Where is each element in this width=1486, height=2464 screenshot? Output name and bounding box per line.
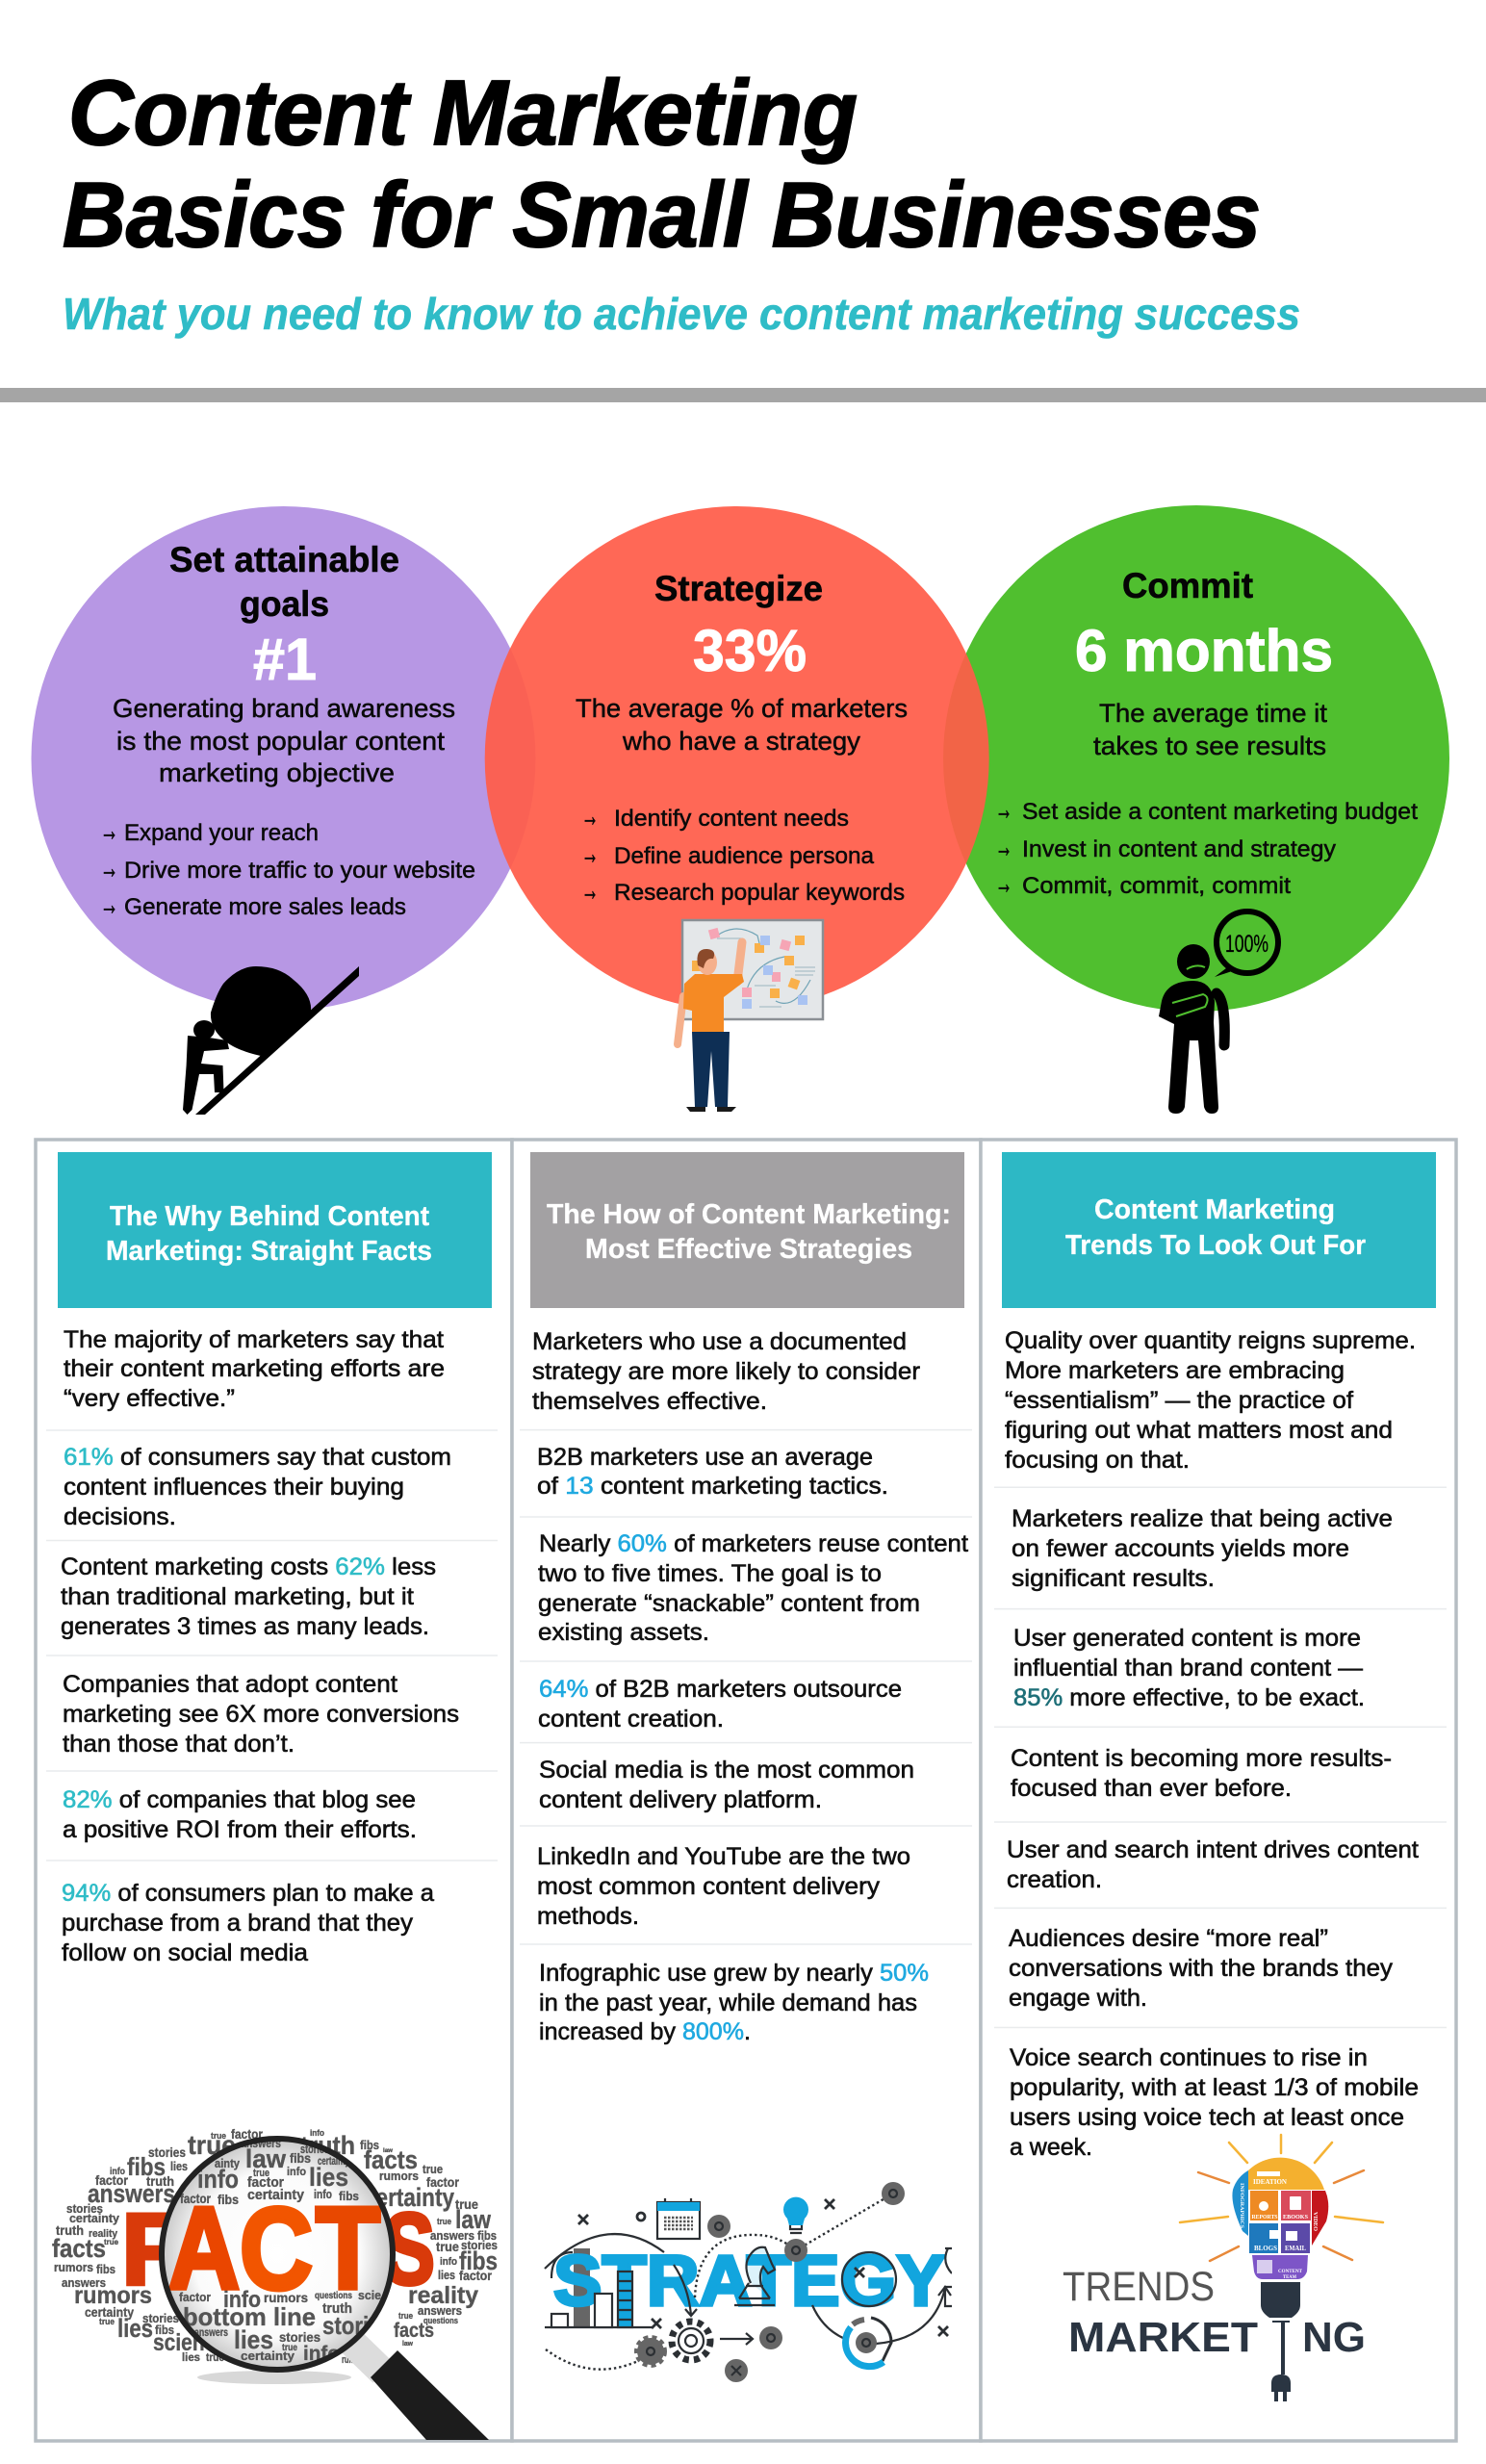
fact: very effective: The majority of marketers say that: [64, 1326, 444, 1353]
bullet list: [581, 799, 905, 907]
icon: facts word cloud under magnifying glass: truth: [322, 2300, 352, 2317]
bullet list: →: [995, 866, 1012, 900]
trend: quality over quantity: figuring out what matters most and: [1005, 1417, 1393, 1444]
header: trends to look out for: [1002, 1152, 1436, 1308]
icon: facts word cloud under magnifying glass: rumors: [342, 2354, 367, 2366]
icon: facts word cloud under magnifying glass: lies: [309, 2163, 348, 2192]
description: [576, 694, 908, 756]
bullet list: →: [995, 792, 1012, 826]
icon: facts word cloud under magnifying glass: questions: [315, 2291, 352, 2301]
icon: facts word cloud under magnifying glass: T: [316, 2182, 380, 2313]
panel: circle backgrounds: [31, 505, 1449, 1012]
trend: fewer accounts: Marketers realize that being active: [1012, 1505, 1393, 1532]
icon: facts word cloud under magnifying glass: F: [121, 2193, 185, 2306]
icon: facts word cloud under magnifying glass: factor: [231, 2126, 263, 2142]
panel: the why behind content marketing: [36, 1140, 512, 2441]
icon: facts word cloud under magnifying glass: true: [423, 2162, 443, 2176]
icon: trends marketing light bulb: VIDEO: [1312, 2212, 1318, 2231]
heading: Set attainable: [169, 540, 399, 579]
icon: facts word cloud under magnifying glass: reality: [89, 2228, 118, 2240]
fact: infographic use: in the past year, while demand has: [539, 1989, 917, 2016]
icon: facts word cloud under magnifying glass: true: [211, 2131, 226, 2141]
trend: user generated content: [1013, 1625, 1365, 1711]
trend: search intent: creation.: [1007, 1866, 1102, 1893]
icon: facts word cloud under magnifying glass: lies: [170, 2159, 188, 2173]
icon: facts word cloud under magnifying glass: scie: [358, 2288, 381, 2302]
fact: 60% reuse: [538, 1530, 968, 1646]
icon: facts word cloud under magnifying glass: fibs: [96, 2262, 115, 2276]
fact: linkedin and youtube: [537, 1843, 910, 1930]
icon: trends marketing light bulb: IDEATION: [1253, 2178, 1287, 2186]
bullet list: Drive more traffic to your website: [124, 858, 475, 884]
icon: facts word cloud under magnifying glass: info: [310, 2128, 324, 2138]
icon: facts word cloud under magnifying glass: truth: [146, 2173, 174, 2189]
fact: 62%: generates 3 times as many leads.: [61, 1613, 429, 1640]
trend: voice search: a week.: [1010, 2134, 1092, 2161]
fact: 82%: 82% of companies that blog see: [63, 1786, 416, 1813]
fact: 13 tactics: B2B marketers use an average: [537, 1444, 873, 1471]
trend: quality over quantity: More marketers are embracing: [1005, 1357, 1345, 1384]
icon: facts word cloud under magnifying glass: true: [206, 2350, 224, 2364]
description: Generating brand awareness: [113, 694, 455, 723]
bullet list: Research popular keywords: [614, 880, 905, 906]
icon: facts word cloud under magnifying glass: answers: [194, 2325, 228, 2339]
icon: facts word cloud under magnifying glass: answers: [62, 2275, 106, 2290]
icon: facts word cloud under magnifying glass: factor: [180, 2191, 211, 2206]
heading: Strategize: [654, 569, 823, 608]
trend: more real conversations: Audiences desire “more real”: [1009, 1925, 1328, 1952]
bullet list: Identify content needs: [614, 806, 849, 832]
fact: infographic use: [539, 1960, 929, 2045]
title: Basics for Small Businesses: [63, 164, 1261, 267]
icon: facts word cloud under magnifying glass: stories: [322, 2311, 393, 2340]
icon: trends marketing light bulb: TEAM: [1283, 2275, 1296, 2280]
icon: facts word cloud under magnifying glass: factor: [459, 2268, 492, 2283]
icon: facts word cloud under magnifying glass: ainty: [215, 2156, 241, 2170]
fact: documented strategy: themselves effective.: [532, 1388, 767, 1415]
bullet list: Commit, commit, commit: [1022, 873, 1291, 899]
icon: trends marketing light bulb: INFOGRAPHICS: [1239, 2183, 1244, 2228]
description: takes to see results: [1093, 732, 1326, 760]
icon: facts word cloud under magnifying glass: fibs: [477, 2228, 497, 2243]
fact: documented strategy: strategy are more likely to consider: [532, 1358, 920, 1385]
fact: documented strategy: [532, 1328, 920, 1415]
icon: facts word cloud under magnifying glass: true: [99, 2317, 115, 2326]
icon: trends marketing light bulb: EMAIL: [1285, 2245, 1306, 2252]
icon: committed person with 100% speech bubble: [1159, 911, 1278, 1114]
icon: facts word cloud under magnifying glass: certainty: [364, 2183, 454, 2212]
trend: results-focused: focused than ever before.: [1011, 1775, 1292, 1802]
header: most effective strategies: The How of Content Marketing:: [547, 1199, 951, 1230]
icon: facts word cloud under magnifying glass: info: [110, 2167, 125, 2177]
header: straight facts: The Why Behind Content: [110, 1201, 429, 1232]
description: [113, 694, 455, 787]
header: straight facts: Marketing: Straight Facts: [106, 1236, 432, 1267]
icon: facts word cloud under magnifying glass: bottom line: [183, 2302, 316, 2331]
bullet list: →: [995, 830, 1012, 863]
fact: social media: content delivery platform.: [539, 1786, 822, 1813]
trend: user generated content: User generated content is more: [1013, 1625, 1361, 1652]
icon: figure pushing a boulder uphill: [183, 966, 359, 1115]
fact: 64% outsource: 64% of B2B marketers outsource: [539, 1676, 902, 1703]
description: [1093, 699, 1328, 760]
icon: facts word cloud under magnifying glass: questions: [423, 2316, 458, 2325]
icon: facts word cloud under magnifying glass: law: [402, 2341, 414, 2348]
icon: trends marketing light bulb: EBOOKS: [1283, 2215, 1309, 2220]
title: [63, 62, 1261, 267]
fact: 82%: a positive ROI from their efforts.: [63, 1816, 417, 1843]
fact: 61%: [64, 1444, 451, 1530]
trend: fewer accounts: significant results.: [1012, 1565, 1215, 1592]
icon: trends marketing light bulb: CONTENT: [1278, 2270, 1303, 2274]
icon: facts word cloud under magnifying glass: factor: [179, 2290, 211, 2304]
fact: very effective: [64, 1326, 445, 1412]
icon: facts word cloud under magnifying glass: stories: [461, 2238, 498, 2252]
big number: #1: [253, 627, 317, 692]
fact: infographic use: increased by 800%.: [539, 2018, 751, 2045]
icon: facts word cloud under magnifying glass: stories: [148, 2144, 186, 2160]
trend: more real conversations: conversations with the brands they: [1009, 1955, 1394, 1982]
icon: facts word cloud under magnifying glass: reality: [408, 2282, 478, 2309]
trend: voice search: [1010, 2044, 1419, 2161]
icon: facts word cloud under magnifying glass: factor: [95, 2172, 128, 2188]
trend: voice search: users using voice tech at least once: [1010, 2104, 1404, 2131]
icon: facts word cloud under magnifying glass: true: [253, 2168, 269, 2179]
icon: committed person with 100% speech bubble: 100%: [1225, 931, 1268, 958]
fact: 64% outsource: [538, 1676, 902, 1732]
icon: facts word cloud under magnifying glass: lies: [234, 2325, 273, 2354]
icon: facts word cloud under magnifying glass: fibs: [339, 2189, 359, 2203]
bullet list: Set aside a content marketing budget: [1022, 799, 1418, 825]
trend: more real conversations: [1009, 1925, 1394, 2012]
fact: 94%: follow on social media: [62, 1939, 308, 1966]
icon: facts word cloud under magnifying glass: lies: [438, 2268, 455, 2282]
big number: 33%: [693, 618, 807, 683]
icon: trends marketing light bulb: TRENDS: [1063, 2264, 1215, 2310]
subtitle: What you need to know to achieve content marketing success: [63, 289, 1300, 339]
icon: facts word cloud under magnifying glass: stories: [142, 2311, 179, 2325]
fact: 94%: [62, 1880, 434, 1966]
icon: facts word cloud under magnifying glass: true: [398, 2311, 413, 2321]
fact: 6X: marketing see 6X more conversions: [63, 1701, 459, 1728]
icon: facts word cloud under magnifying glass: certainty: [241, 2348, 295, 2363]
bullet list: Generate more sales leads: [124, 894, 406, 920]
trend: fewer accounts: [1012, 1505, 1393, 1592]
trend: results-focused: [1011, 1745, 1392, 1802]
icon: facts word cloud under magnifying glass: law: [455, 2205, 492, 2234]
fact: 60% reuse: existing assets.: [538, 1619, 709, 1646]
icon: facts word cloud under magnifying glass: certainty: [247, 2187, 305, 2203]
icon: facts word cloud under magnifying glass: true: [188, 2130, 236, 2160]
icon: strategy word illustration: STRATEGY: [553, 2241, 945, 2321]
description: is the most popular content: [116, 727, 446, 756]
bullet list: [100, 813, 475, 921]
panel: content marketing trends: [981, 1140, 1456, 2441]
fact: 61%: content influences their buying: [64, 1474, 404, 1501]
icon: facts word cloud under magnifying glass: A: [168, 2182, 240, 2313]
trend: fewer accounts: on fewer accounts yields more: [1012, 1535, 1349, 1562]
icon: facts word cloud under magnifying glass: facts: [52, 2234, 106, 2263]
icon: facts word cloud under magnifying glass: stories: [279, 2329, 320, 2345]
trend: quality over quantity: “essentialism” — the practice of: [1005, 1387, 1353, 1414]
fact: linkedin and youtube: most common content delivery: [537, 1873, 881, 1900]
description: who have a strategy: [622, 727, 860, 756]
bullet list: →: [581, 873, 599, 907]
icon: facts word cloud under magnifying glass: true: [437, 2217, 451, 2226]
icon: trends marketing light bulb: MARKET: [1068, 2314, 1258, 2361]
icon: facts word cloud under magnifying glass: fibs: [127, 2152, 166, 2181]
fact: 13 tactics: [537, 1444, 888, 1500]
fact: infographic use: Infographic use grew by nearly 50%: [539, 1960, 929, 1987]
fact: 94%: 94% of consumers plan to make a: [62, 1880, 434, 1907]
icon: facts word cloud under magnifying glass: true: [282, 2343, 297, 2353]
panel: the how of content marketing: [512, 1140, 981, 2441]
icon: facts word cloud under magnifying glass: lies: [117, 2314, 153, 2343]
fact: 13 tactics: of 13 content marketing tactics.: [537, 1473, 888, 1500]
panel: strategize: [576, 569, 908, 907]
bullet list: [995, 792, 1418, 900]
description: The average % of marketers: [576, 694, 908, 723]
trend: quality over quantity: Quality over quantity reigns supreme.: [1005, 1327, 1416, 1354]
fact: 61%: decisions.: [64, 1503, 176, 1530]
heading: goals: [240, 584, 329, 624]
icon: facts word cloud under magnifying glass: true: [104, 2238, 119, 2246]
trend: quality over quantity: [1005, 1327, 1416, 1474]
icon: facts word cloud under magnifying glass: info: [303, 2343, 340, 2365]
trend: results-focused: Content is becoming more results-: [1011, 1745, 1392, 1772]
icon: facts word cloud under magnifying glass: fibs: [360, 2138, 379, 2152]
panel: set attainable goals: [100, 540, 475, 921]
icon: facts word cloud under magnifying glass: info: [440, 2256, 457, 2268]
icon: facts word cloud under magnifying glass: C: [240, 2183, 313, 2314]
trend: user generated content: influential than brand content —: [1013, 1655, 1363, 1681]
fact: linkedin and youtube: LinkedIn and YouTube are the two: [537, 1843, 910, 1870]
fact: 62%: [61, 1553, 436, 1640]
icon: facts word cloud under magnifying glass: answers: [430, 2228, 474, 2243]
icon: trends marketing light bulb: BLOGS: [1254, 2245, 1277, 2252]
fact: 62%: than traditional marketing, but it: [61, 1583, 414, 1610]
bullet list: →: [581, 836, 599, 870]
trend: voice search: Voice search continues to rise in: [1010, 2044, 1368, 2071]
icon: facts word cloud under magnifying glass: rumors: [74, 2282, 152, 2309]
fact: documented strategy: Marketers who use a documented: [532, 1328, 907, 1355]
heading: Commit: [1122, 566, 1253, 605]
bullet list: Define audience persona: [614, 843, 875, 869]
bullet list: →: [100, 851, 118, 885]
icon: person planning at a whiteboard: [678, 920, 823, 1112]
bullet list: Invest in content and strategy: [1022, 836, 1336, 862]
trend: search intent: User and search intent drives content: [1007, 1836, 1419, 1863]
icon: facts word cloud under magnifying glass: law: [245, 2144, 287, 2173]
icon: facts word cloud under magnifying glass: lies: [182, 2350, 200, 2364]
icon: facts word cloud under magnifying glass: law: [383, 2148, 393, 2154]
header: trends to look out for: Content Marketing: [1094, 1194, 1335, 1225]
trend: more real conversations: engage with.: [1009, 1985, 1147, 2012]
icon: facts word cloud under magnifying glass: truth: [56, 2222, 84, 2238]
fact: social media: Social media is the most common: [539, 1757, 914, 1784]
description: The average time it: [1099, 699, 1328, 728]
fact: 64% outsource: content creation.: [538, 1706, 724, 1732]
icon: facts word cloud under magnifying glass: rumors: [379, 2169, 419, 2183]
icon: facts word cloud under magnifying glass: certainty: [85, 2304, 134, 2320]
icon: facts word cloud under magnifying glass: fibs: [459, 2246, 498, 2275]
icon: facts word cloud under magnifying glass: [52, 2126, 498, 2440]
bullet list: →: [581, 799, 599, 833]
panel: commit: [995, 566, 1418, 900]
fact: 6X: than those that don’t.: [63, 1731, 295, 1758]
fact: very effective: “very effective.”: [64, 1385, 235, 1412]
icon: facts word cloud under magnifying glass: stories: [66, 2201, 103, 2216]
icon: facts word cloud under magnifying glass: certainty: [318, 2154, 349, 2168]
description: marketing objective: [159, 758, 395, 787]
icon: facts word cloud under magnifying glass: info: [223, 2287, 261, 2313]
icon: facts word cloud under magnifying glass: certainty: [69, 2211, 120, 2225]
icon: facts word cloud under magnifying glass: true: [436, 2239, 459, 2254]
big number: 6 months: [1075, 618, 1333, 683]
header: most effective strategies: [530, 1152, 964, 1308]
icon: strategy word illustration: [545, 2182, 952, 2382]
icon: facts word cloud under magnifying glass: science: [153, 2329, 227, 2356]
icon: facts word cloud under magnifying glass: fibs: [290, 2150, 311, 2166]
trend: quality over quantity: focusing on that.: [1005, 1447, 1190, 1474]
icon: facts word cloud under magnifying glass: truth: [300, 2131, 355, 2160]
icon: facts word cloud under magnifying glass: S: [383, 2193, 435, 2306]
icon: facts word cloud under magnifying glass: info: [197, 2165, 239, 2194]
icon: facts word cloud under magnifying glass: stories: [300, 2142, 329, 2156]
icon: facts word cloud under magnifying glass: info: [287, 2165, 306, 2178]
bullet list: →: [100, 887, 118, 921]
icon: facts word cloud under magnifying glass: rumors: [54, 2260, 93, 2274]
heading: [169, 540, 399, 624]
icon: trends marketing light bulb: [1063, 2135, 1383, 2401]
fact: social media: [539, 1757, 914, 1813]
trend: voice search: popularity, with at least 1/3 of mobile: [1010, 2074, 1419, 2101]
fact: 94%: purchase from a brand that they: [62, 1910, 414, 1937]
icon: facts word cloud under magnifying glass: fibs: [155, 2323, 174, 2337]
icon: facts word cloud under magnifying glass: factor: [247, 2174, 284, 2191]
fact: 62%: Content marketing costs 62% less: [61, 1553, 436, 1580]
title: Content Marketing: [68, 62, 858, 165]
icon: facts word cloud under magnifying glass: facts: [364, 2145, 418, 2174]
bullet list: Expand your reach: [124, 820, 319, 846]
fact: 6X: [63, 1671, 459, 1758]
icon: facts word cloud under magnifying glass: info: [314, 2187, 332, 2201]
icon: facts word cloud under magnifying glass: answers: [241, 2136, 281, 2150]
icon: facts word cloud under magnifying glass: fibs: [218, 2192, 239, 2207]
icon: facts word cloud under magnifying glass: answers: [88, 2179, 175, 2208]
icon: facts word cloud under magnifying glass: true: [455, 2196, 478, 2212]
fact: 60% reuse: two to five times. The goal is to: [538, 1560, 882, 1587]
trend: user generated content: 85% more effective, to be exact.: [1013, 1684, 1365, 1711]
icon: trends marketing light bulb: REPORTS: [1251, 2215, 1278, 2220]
trend: search intent: [1007, 1836, 1419, 1893]
header: straight facts: [58, 1152, 492, 1308]
icon: facts word cloud under magnifying glass: answers: [418, 2303, 462, 2318]
fact: 60% reuse: generate “snackable” content from: [538, 1590, 920, 1617]
fact: 82%: [63, 1786, 417, 1843]
icon: trends marketing light bulb: NG: [1302, 2314, 1366, 2361]
fact: linkedin and youtube: methods.: [537, 1903, 639, 1930]
header: trends to look out for: Trends To Look Out For: [1065, 1230, 1366, 1261]
icon: facts word cloud under magnifying glass: rumors: [264, 2290, 308, 2305]
header: most effective strategies: Most Effective Strategies: [585, 1234, 912, 1265]
icon: facts word cloud under magnifying glass: facts: [394, 2320, 434, 2342]
fact: very effective: their content marketing efforts are: [64, 1355, 445, 1382]
fact: 6X: Companies that adopt content: [63, 1671, 397, 1698]
fact: 60% reuse: Nearly 60% of marketers reuse content: [539, 1530, 968, 1557]
fact: 61%: 61% of consumers say that custom: [64, 1444, 451, 1471]
bullet list: →: [100, 813, 118, 847]
icon: facts word cloud under magnifying glass: factor: [426, 2174, 459, 2190]
